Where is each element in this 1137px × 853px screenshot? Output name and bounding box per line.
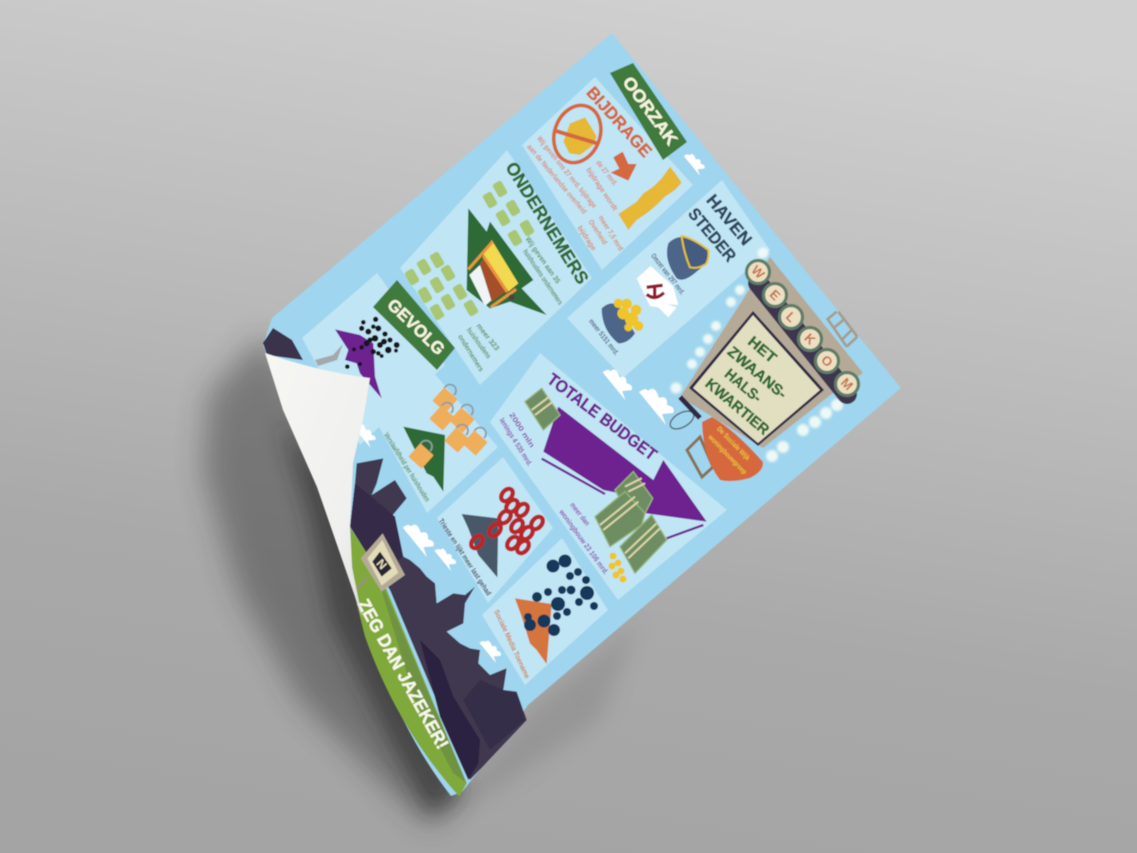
icon: yellow wavy bar	[618, 167, 682, 230]
panel: social media	[482, 538, 608, 685]
ondernemers heading: ONDERNEMERS	[501, 158, 593, 288]
havensteden small text: meer 5151 mrd.	[587, 317, 621, 357]
sign title: KWARTIER	[702, 375, 772, 439]
bulb letters	[746, 260, 858, 396]
icon: gold pot	[602, 299, 643, 343]
dark screen border	[689, 311, 824, 446]
bijdrage small text: Wij geven ons 27 mrd. bijdrage	[535, 134, 599, 210]
icon: purple triangle	[335, 329, 382, 398]
icon: grey arrow tip	[315, 344, 343, 366]
sign title	[702, 333, 790, 439]
welkom sign	[670, 248, 863, 462]
bijdrage heading: BIJDRAGE	[582, 83, 656, 161]
ondernemers small text: ondernemers	[456, 333, 486, 373]
bags caption: Verslaafdheid per huishouden	[382, 431, 432, 504]
havensteden small text	[587, 252, 687, 357]
icon: green arrow with shop	[467, 208, 547, 315]
icon: anchor sail	[637, 266, 678, 317]
sign bracket and wire	[667, 397, 713, 477]
poster	[263, 33, 901, 797]
havensteden heading: HAVEN	[702, 191, 756, 249]
panel: verslaafdheid bags	[378, 372, 498, 513]
bulb letters: L	[783, 309, 799, 325]
bijdrage small text: Overheid	[587, 218, 610, 247]
panel: gevolg	[302, 273, 445, 445]
cast shadow of the curled poster	[203, 335, 640, 825]
bulb letters: K	[801, 330, 819, 348]
ondernemers small text: huishoudens ondernemers	[521, 248, 565, 306]
icon: orange triangle	[515, 598, 552, 664]
icon: orange shield tag: De Sociale Wijk	[715, 426, 751, 462]
budget small text: woningbouw 23 106 mrd.	[557, 507, 611, 576]
green hill strip	[350, 527, 467, 797]
budget small text: 2000 mln	[507, 411, 537, 450]
red rings caption: Trieste en lijkt meer last gehad	[437, 517, 494, 598]
icon: red rings	[469, 487, 545, 555]
sign: N road sign: N	[374, 556, 390, 572]
ondernemers small text: meer 323	[475, 322, 501, 352]
sign board	[680, 257, 863, 448]
panel: totale budget	[490, 353, 727, 600]
bulb letters: E	[767, 287, 784, 304]
icon: black particles	[345, 317, 400, 369]
bulb letters: W	[748, 262, 768, 282]
budget small text: lenings 4 535 mrd.	[498, 416, 534, 468]
poster sheet	[263, 33, 901, 796]
small green squares	[404, 180, 535, 321]
icon: orange arrow	[611, 152, 637, 181]
bijdrage small text	[525, 134, 626, 253]
bijdrage small text: bijdrage wordt	[584, 166, 620, 213]
sign title: HALS-	[721, 366, 765, 406]
totale budget heading: TOTALE BUDGET	[544, 370, 661, 465]
clouds	[353, 154, 705, 663]
icon: green triangle with bags	[403, 427, 445, 492]
hill darker band	[373, 563, 467, 783]
sign: N road sign	[355, 533, 405, 592]
budget small text: meer dan	[568, 501, 592, 528]
icon: purse	[667, 236, 709, 280]
bijdrage small text: aan de Nederlandse overheid	[525, 142, 589, 216]
gevolg banner	[373, 280, 455, 370]
gevolg banner: GEVOLG	[384, 295, 448, 359]
havensteden heading: STEDER	[684, 204, 740, 266]
screen	[693, 315, 820, 443]
bulb letters: M	[838, 375, 856, 393]
dark bulb backing	[758, 283, 847, 394]
panel: ondernemers	[400, 150, 592, 385]
icon: money stacks	[525, 388, 667, 573]
sign title: HET	[744, 333, 780, 367]
oorzaak banner	[610, 63, 687, 160]
ondernemers small text	[456, 235, 565, 373]
icon: navy blobs	[524, 554, 598, 636]
bijdrage small text: bijdrage	[576, 224, 598, 252]
sign frame ladder	[827, 312, 857, 347]
icon: orange shield tag: woningbouwgroep	[706, 433, 748, 476]
peeled white flap	[265, 353, 370, 617]
budget small text	[498, 411, 611, 576]
panel: bijdrage	[522, 77, 693, 270]
social media caption: Sociale Media Toename	[492, 608, 532, 680]
havensteden small text: Omzet van 297 mrd.	[649, 252, 687, 296]
bijdrage small text: de 27 mrd.	[594, 158, 620, 188]
panel: havensteden	[567, 180, 770, 378]
bulb letters: O	[818, 352, 836, 370]
slogan: ZEG DAN JAZEKER!	[354, 596, 452, 752]
havensteden heading	[684, 191, 756, 266]
icon: purple budget arrow	[542, 407, 707, 538]
ondernemers small text: huishoudens	[465, 326, 493, 360]
icon: shopping bags	[408, 385, 488, 469]
skyline at peeled corner	[263, 328, 303, 360]
icon: orange shield tag	[702, 417, 763, 481]
icon: gold coins	[608, 552, 626, 582]
icon: dark triangle with red rings	[462, 514, 498, 577]
ondernemers small text: Wij geven aan 35	[524, 235, 562, 285]
lights	[670, 248, 843, 462]
icon: prohibited cheese	[546, 99, 609, 169]
darker blocks	[350, 483, 403, 573]
panel: red rings	[437, 457, 553, 603]
sign title: ZWAANS-	[724, 343, 790, 403]
bijdrage small text: meer 7,5 mrd	[597, 214, 626, 253]
oorzaak banner: OORZAK	[619, 73, 682, 150]
skyline	[350, 458, 527, 780]
